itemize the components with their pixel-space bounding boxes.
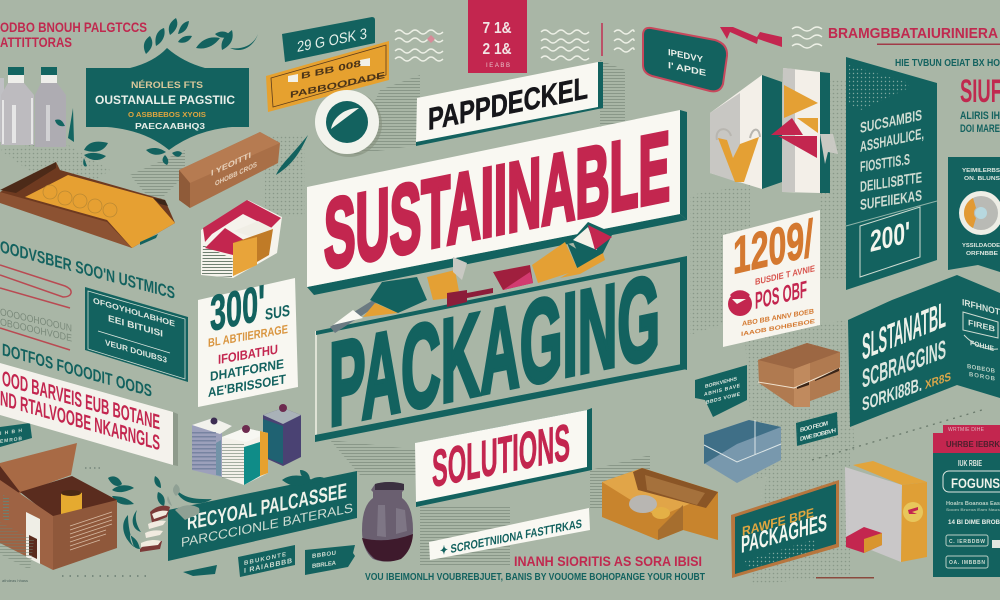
panel: right-bottom teal product panel: 14 BI DIME BROB (948, 520, 1000, 526)
panel: 1209 percent card (723, 209, 820, 347)
icon: plastic bottles (0, 67, 74, 147)
stat tab: 299 on teal (282, 17, 375, 62)
callout: teal rounded badge (643, 28, 727, 91)
icon: leaves around badge (83, 18, 308, 175)
panel: teal notice: EEI BITUISI (108, 313, 163, 339)
panel: tall teal tip panel: DEILLISBTTE (860, 169, 922, 196)
panel: 300 percent card: IFOIBATHU (218, 342, 278, 367)
icon: geometric paper fold shapes (330, 222, 613, 333)
panel: right-bottom teal product panel: Soom Bruroa Eam Naus (946, 507, 1000, 512)
heading: tilted teal line: OODVSBER SOO'N USTMICS (0, 236, 175, 303)
icon: dark vase (362, 482, 413, 562)
panel: teal notice: OFGOYHOLABHOE (93, 296, 176, 329)
panel: 300 percent card: 300' (210, 274, 265, 342)
banner: recycled packaging materials: PARCCCIONLE BATERALS (181, 500, 353, 550)
panel: right-bottom teal product panel: C. IERBDBW (949, 539, 985, 545)
label: gold tag: B BB 008 (301, 58, 361, 81)
icon: crimson pill lines (0, 265, 71, 350)
wave decoration group (395, 23, 822, 61)
icon: hexagon box (201, 200, 282, 278)
panel: sustainable packaging chevron: BOBEOB (967, 364, 996, 375)
panel: crimson stat: 2 1& (482, 41, 512, 58)
panel: 300 percent card: BL ABTIIERRAGE (208, 322, 288, 350)
panel: right teal donut panel: YEIMILERBS (962, 168, 1000, 174)
caption: faint gray lines: OOOOOHOOOUN (0, 307, 72, 335)
panel: crimson stat (468, 0, 527, 73)
label: teal arrow tag: BBRLEA (312, 561, 337, 570)
label: gold tag (266, 41, 389, 112)
heading: teal tilted line: DOTFOS FOOODIT OODS (2, 339, 152, 401)
callout: small teal label: BOO FEOM (800, 420, 828, 434)
panel: sustainable packaging chevron: SORKI88B. (862, 374, 922, 416)
bottom text lines: VOU IBEIMONLH VOUBREBJUET, BANIS BY VOUOME BOHOPANGE YOUR HOUBT (365, 572, 705, 583)
top-left heading (0, 19, 147, 50)
label: small teal tag left: EMROB (0, 436, 22, 445)
callout: small teal note: ABHIS BAVE (704, 383, 741, 398)
panel: right-bottom teal product panel (933, 425, 1000, 577)
icon: folded brown package: I YEOITTI (211, 150, 251, 178)
panel: tall teal tip panel: SUFEIIEKAS (860, 187, 922, 214)
panel: 1209 percent card: POS OBF (755, 276, 807, 315)
label: small teal tag: BBUKONTE (244, 552, 286, 567)
chart: donut (959, 191, 1000, 235)
title: solutions band (415, 408, 592, 507)
callout: small teal label: DWE BOBBVH (800, 427, 836, 443)
label: teal arrow tag (305, 545, 355, 575)
caption: faint gray lines: OBOOOOHVODE (0, 317, 72, 345)
panel: right teal donut panel: ON. BLUNS (964, 176, 1000, 182)
panel: 1209 percent card: IAAOB BOHBEBOE (741, 319, 815, 338)
bottom text lines: INANH SIORITIS AS SORA IBISI (514, 553, 702, 569)
panel: right-bottom teal product panel: IUK RBIE (958, 459, 982, 468)
decorative dotted textures (0, 60, 855, 585)
icon: gold tray with brown frame (0, 162, 175, 248)
panel: sustainable packaging chevron (848, 275, 1000, 427)
callout: small teal note: BBDS VOWE (706, 391, 741, 406)
icon: cardboard box (758, 343, 840, 407)
panel: badge with sustainable plastic text: PAECAABHQ3 (135, 122, 206, 131)
icon: leaves and shells (108, 470, 326, 552)
panel: 300 percent card (198, 274, 298, 407)
label: small teal tag: I RAIABBBB (244, 558, 292, 575)
callout: small teal label (796, 412, 838, 446)
panel: 1209 percent card: 1209/ (733, 209, 813, 286)
dotted trail (812, 410, 982, 460)
icon: open cardboard box (0, 443, 117, 570)
icon: book-shaped carton (845, 461, 927, 562)
panel: 1209 percent card: BUSDIE T AVNIE (755, 263, 815, 287)
panel: sustainable packaging chevron: FIREB (968, 318, 995, 334)
icon: blue box (704, 420, 781, 483)
heading: white crimson band: OOD BARVEIS EUB BOTANE (2, 366, 160, 435)
label: small teal tag (238, 545, 295, 577)
icon: folded brown package: OHOBB CROS (215, 160, 257, 188)
icon: bottom-left hatch and caption: athdeas hhass (2, 578, 28, 583)
panel: badge with sustainable plastic text (86, 48, 249, 150)
callout: small teal note (695, 365, 747, 417)
panel: right-bottom teal product panel: OA. IMBBBN (949, 560, 985, 566)
panel: 300 percent card: DHATFORNE (210, 356, 284, 384)
stat tab: 299 on teal: 29 G OSK 3 (297, 26, 367, 56)
panel: packaches sign: PACKAGHES (741, 509, 827, 559)
bottom text lines (365, 553, 705, 583)
panel: packaches sign: RAWFE BPE (742, 505, 814, 539)
icon: bottom-left hatch and caption (0, 468, 152, 583)
heading: white crimson band (0, 363, 178, 466)
panel: right teal donut panel: YSSILDAODE (962, 243, 1000, 249)
banner: sustainable fasteners: ✦ SCROETNIIONA FASTTRKAS (440, 517, 582, 558)
icon: folded brown package (179, 132, 280, 208)
panel: 300 percent card: SUS (265, 302, 290, 324)
panel: tall teal tip panel: SUCSAMBIS (860, 107, 922, 137)
panel: tall teal tip panel: ASSHAULICE, (860, 126, 924, 156)
panel: tall teal tip panel: FIOSTTIS.S (860, 151, 910, 176)
label: gold tag: PABBOODADE (290, 70, 385, 100)
top-left heading: ATTITTORAS (0, 34, 72, 50)
banner: recycled packaging materials (168, 471, 357, 577)
title: sustainable band (307, 110, 687, 295)
panel: packaches sign (731, 480, 839, 578)
title: packaging frame (315, 250, 687, 452)
panel: right-bottom teal product panel: WRTMIE DIHE (948, 427, 985, 433)
icon: gold tray (602, 468, 718, 540)
icon: crimson zigzag (720, 27, 782, 47)
panel: 300 percent card: AE'BRISSOET (208, 371, 286, 400)
title: solutions band: SOLUTIONS (432, 413, 570, 499)
rule: bottom right (816, 577, 874, 578)
panel: right-bottom teal product panel: UHRBE IEBRK (946, 440, 1000, 449)
panel: badge with sustainable plastic text: O ASBBEBOS XYOIS (128, 112, 206, 119)
heading: white crimson band: ND RTALVOOBE NKARNGLS (0, 386, 160, 455)
panel: right teal donut panel: ORFNBBE (966, 251, 999, 257)
label: teal arrow tag: BBBOU (312, 551, 336, 560)
panel: sustainable packaging chevron: FOHHE (970, 339, 994, 353)
panel: crimson stat: IEABB (486, 63, 510, 69)
panel: 1209 percent card: ABO BB ANNV BOEB (742, 308, 814, 328)
panel: sustainable packaging chevron: BOROB (969, 372, 996, 383)
icon: circle seal (315, 90, 382, 157)
callout: small teal note: BORKVEHHS (705, 376, 738, 390)
callout: teal rounded badge: I' APDE (668, 60, 706, 78)
panel: tall teal tip panel: 200' (870, 215, 910, 259)
banner: recycled packaging materials: RECYOAL PALCASSEE (187, 480, 347, 535)
icon: stacked boxes (192, 404, 301, 485)
panel: right teal donut panel (948, 157, 1000, 272)
callout: teal rounded badge: IPEDVY (668, 47, 703, 64)
top-right heading (828, 25, 1000, 135)
panel: right-bottom teal product panel: Hoalrs Boanoas Eas (946, 501, 1000, 507)
top-left heading: ODBO BNOUH PALGTCCS (0, 19, 147, 35)
title: pappdeckel band: PAPPDECKEL (428, 70, 588, 137)
panel: tall teal tip panel (846, 57, 937, 290)
panel: teal notice (85, 287, 188, 382)
panel: crimson stat: 7 1& (482, 20, 512, 37)
icon: geometric book panels (710, 68, 838, 193)
label: small teal tag left: IHBH (0, 428, 22, 437)
panel: sustainable packaging chevron: XR8S (925, 369, 951, 392)
panel: badge with sustainable plastic text: OUSTANALLE PAGSTIIC (95, 93, 235, 107)
panel: teal notice: VEUR DOIUBS3 (105, 338, 167, 365)
panel: badge with sustainable plastic text: NÉROLES FTS (131, 80, 203, 90)
label: small teal tag left (0, 423, 32, 447)
